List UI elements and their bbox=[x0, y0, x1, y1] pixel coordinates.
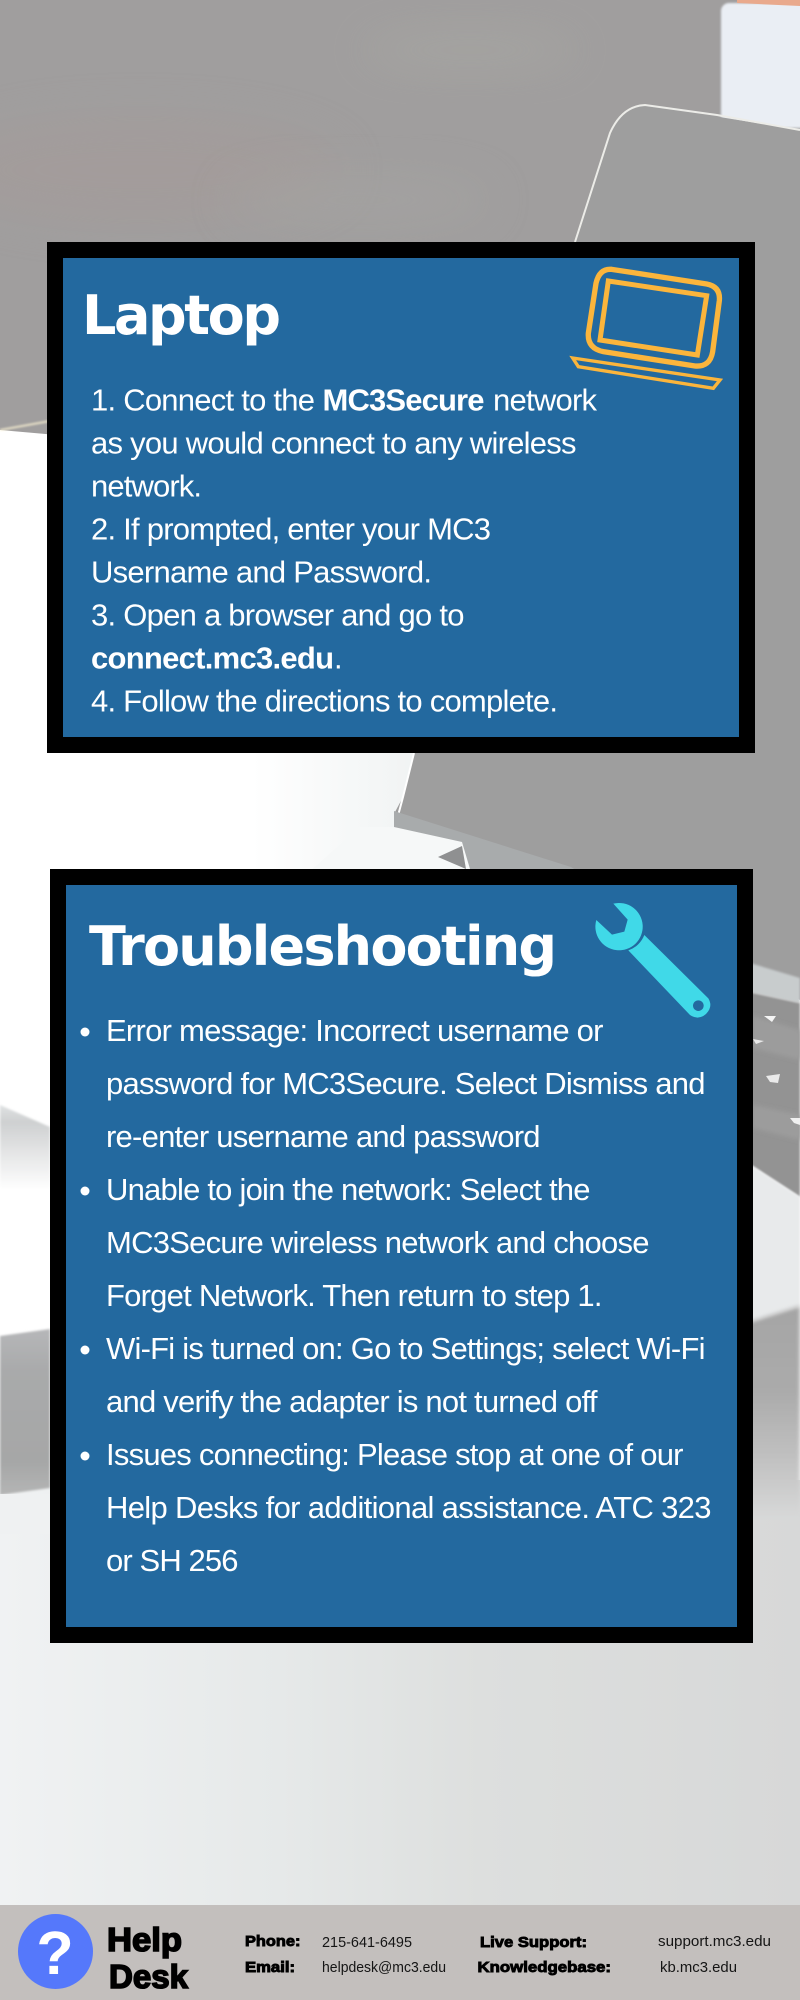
contact values: kb.mc3.edu bbox=[660, 1960, 737, 1976]
icon: question mark: ? bbox=[36, 1919, 74, 1987]
contact labels bbox=[245, 1933, 611, 1976]
text block: laptop steps: as you would connect to any wireless bbox=[91, 426, 576, 460]
text block: laptop steps: 2. If prompted, enter your MC3 bbox=[91, 512, 491, 546]
text block: laptop steps: 1. Connect to the bbox=[91, 382, 315, 418]
panel: troubleshooting bbox=[50, 869, 753, 1643]
heading: Laptop: Laptop bbox=[82, 284, 281, 347]
text block: laptop steps bbox=[91, 382, 598, 718]
list: troubleshooting tips: Issues connecting: Please stop at one of our bbox=[106, 1437, 684, 1472]
list: troubleshooting tips: Forget Network. Then return to step 1. bbox=[106, 1278, 602, 1313]
list: troubleshooting tips bbox=[80, 1013, 712, 1578]
icon: question mark bbox=[18, 1914, 93, 1989]
list: troubleshooting tips: re-enter username and password bbox=[106, 1119, 540, 1154]
contact labels: Live Support: bbox=[480, 1934, 587, 1951]
contact values bbox=[322, 1934, 771, 1976]
contact labels: Phone: bbox=[245, 1933, 300, 1950]
text block: laptop steps: network. bbox=[91, 468, 202, 504]
text block: laptop steps: 4. Follow the directions to complete. bbox=[91, 684, 558, 718]
text block: laptop steps: 3. Open a browser and go to bbox=[91, 598, 464, 632]
list: troubleshooting tips: Help Desks for additional assistance. ATC 323 bbox=[106, 1490, 712, 1525]
panel: laptop bbox=[47, 242, 755, 753]
list: troubleshooting tips: or SH 256 bbox=[106, 1543, 238, 1578]
contact values: 215-641-6495 bbox=[322, 1935, 412, 1951]
heading: Help Desk: Desk bbox=[109, 1958, 189, 1995]
list: troubleshooting tips: Error message: Incorrect username or bbox=[106, 1013, 604, 1048]
icon: laptop bbox=[573, 269, 720, 388]
list: troubleshooting tips: MC3Secure wireless network and choose bbox=[106, 1225, 650, 1260]
list: troubleshooting tips: and verify the adapter is not turned off bbox=[106, 1384, 598, 1419]
heading: Help Desk: Help bbox=[107, 1921, 182, 1958]
contact labels: Email: bbox=[245, 1959, 295, 1976]
list: troubleshooting tips: password for MC3Secure. Select Dismiss and bbox=[106, 1066, 706, 1101]
text block: laptop steps: Username and Password. bbox=[91, 554, 432, 590]
text block: laptop steps: MC3Secure bbox=[322, 382, 484, 418]
text block: laptop steps: . bbox=[334, 640, 343, 676]
contact values: support.mc3.edu bbox=[658, 1934, 771, 1950]
text block: laptop steps: network bbox=[493, 382, 598, 418]
footer: help desk contacts bbox=[0, 1905, 800, 2000]
contact values: helpdesk@mc3.edu bbox=[322, 1960, 446, 1976]
icon: wrench bbox=[595, 903, 710, 1018]
contact labels: Knowledgebase: bbox=[478, 1959, 611, 1976]
list: troubleshooting tips: Unable to join the network: Select the bbox=[106, 1172, 590, 1207]
text block: laptop steps: connect.mc3.edu bbox=[91, 640, 334, 676]
heading: Troubleshooting: Troubleshooting bbox=[89, 915, 557, 978]
heading: Help Desk bbox=[107, 1921, 189, 1995]
list: troubleshooting tips: Wi-Fi is turned on: Go to Settings; select Wi-Fi bbox=[106, 1331, 706, 1366]
